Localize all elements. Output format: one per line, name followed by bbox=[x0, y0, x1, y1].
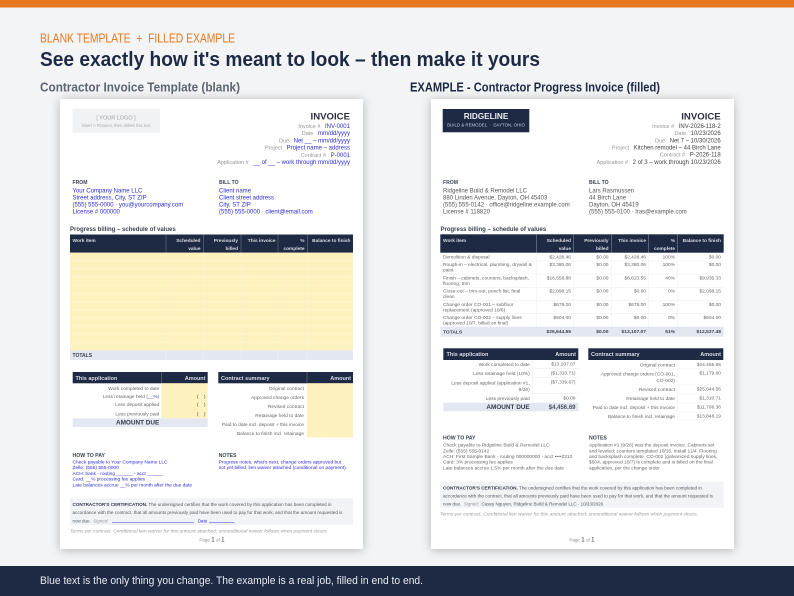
row: change order 001: $0.00 bbox=[709, 302, 721, 308]
contract summary table: Revised contract bbox=[268, 404, 305, 410]
logo placeholder bbox=[72, 109, 160, 133]
row: demolition bbox=[443, 255, 721, 261]
schedule of values table: Balance to finish bbox=[683, 238, 721, 244]
logo: Ridgeline bbox=[443, 109, 529, 132]
row: finish: $0.00 bbox=[596, 276, 609, 282]
contract summary table: $25,644.55 bbox=[697, 386, 721, 392]
this application table: ($7,339.67) bbox=[551, 380, 576, 386]
how to pay: HOW TO PAY bbox=[72, 453, 106, 459]
row: change order 002 bbox=[443, 315, 721, 326]
schedule of values table: billed bbox=[225, 246, 238, 252]
logo: Ridgeline: BUILD & REMODEL · DAYTON, OHIO bbox=[447, 123, 525, 128]
schedule of values table: Scheduled bbox=[547, 238, 571, 244]
schedule of values table: Balance to finish bbox=[312, 238, 351, 244]
contract summary table: Original contract bbox=[269, 386, 305, 392]
row: close-out: 0% bbox=[668, 289, 676, 295]
schedule of values table: Previously bbox=[584, 238, 609, 244]
notes: not yet billed, lien waiver attached (conditional on payment). bbox=[219, 465, 347, 471]
invoice heading and meta: INVOICE bbox=[311, 112, 351, 122]
contract summary table: $1,179.00 bbox=[699, 370, 721, 376]
notes: and leveled; counters templated 10/16, install 11/4. Flooring bbox=[589, 448, 717, 454]
from block: 880 Linden Avenue, Dayton, OH 45403 bbox=[443, 196, 548, 202]
certification box: Date bbox=[198, 518, 208, 523]
invoice heading and meta: Application # __ of __ – work through mm/dd/yyyy bbox=[217, 160, 350, 166]
notes: application, per the change order. bbox=[589, 465, 661, 471]
contract summary table: Amount bbox=[330, 376, 351, 382]
from block bbox=[72, 180, 183, 216]
bill to block bbox=[589, 180, 687, 216]
row: change order 002: 0% bbox=[668, 315, 676, 321]
row: change order 002: $0.00 bbox=[634, 315, 646, 321]
how to pay: Check payable to Your Company Name LLC bbox=[72, 460, 168, 466]
how to pay: Late balances accrue 1.5% per month after the due date bbox=[443, 465, 564, 471]
row: rough-in: $3,380.06 bbox=[624, 262, 646, 268]
schedule of values table bbox=[440, 234, 724, 337]
row: change order 001: $675.00 bbox=[553, 302, 571, 308]
notes: $504, approved 10/7) is complete and is billed on the final bbox=[589, 460, 713, 466]
this application table: Less deposit applied bbox=[115, 402, 160, 408]
row: totals: TOTALS bbox=[443, 330, 463, 336]
invoice heading and meta: Due Net 7 – 10/30/2026 bbox=[655, 139, 721, 145]
how to pay: Zelle: (555) 555-0142 bbox=[443, 448, 490, 454]
logo: Ridgeline: RIDGELINE bbox=[464, 112, 509, 121]
how to pay: Late balances accrue __% per month after the due date bbox=[72, 482, 192, 488]
this application table: 9/26) bbox=[519, 387, 530, 393]
row: rough-in: 100% bbox=[663, 262, 676, 268]
row: change order 001: $675.00 bbox=[628, 302, 646, 308]
bill to block: City, ST ZIP bbox=[219, 203, 251, 209]
row: change order 002: $504.00 bbox=[703, 315, 721, 321]
from block: Your Company Name LLC bbox=[72, 188, 143, 194]
invoice heading and meta bbox=[597, 112, 721, 166]
this application table: Work completed to date bbox=[108, 386, 160, 392]
certification box: CONTRACTOR'S CERTIFICATION. The undersigned certifies that the work covered by this application has been completed in bbox=[72, 502, 332, 507]
row: finish bbox=[443, 276, 721, 287]
schedule of values table: complete bbox=[283, 246, 305, 252]
this application table: ( ) bbox=[197, 394, 206, 400]
row: change order 001 bbox=[443, 302, 721, 314]
row: finish: $16,556.88 bbox=[547, 276, 571, 282]
row: rough-in: Rough-in – electrical, plumbing, drywall & bbox=[443, 262, 533, 268]
page number: Page 1 of 1 bbox=[569, 536, 595, 543]
row: close-out: $2,098.15 bbox=[549, 289, 571, 295]
from block: (555) 555-0142 · office@ridgeline.example.com bbox=[443, 203, 570, 209]
how to pay: Zelle: (555) 555-0000 bbox=[72, 465, 119, 471]
row: close-out bbox=[443, 289, 721, 300]
row: demolition: Demolition & disposal bbox=[443, 255, 490, 261]
row: change order 001: 100% bbox=[663, 302, 676, 308]
from block: (555) 555-0000 · you@yourcompany.com bbox=[72, 203, 183, 209]
how to pay bbox=[443, 436, 573, 471]
schedule of values table bbox=[70, 234, 353, 360]
this application table: Less retainage held (10%) bbox=[473, 371, 530, 377]
schedule of values table: Work item bbox=[72, 238, 96, 244]
how to pay: ACH: First Sample Bank - routing 000000000 - acct ••••2210 bbox=[443, 454, 573, 460]
this application table bbox=[73, 372, 208, 427]
certification box: accordance with the contract, that all amounts previously paid have been used to pay for that work, and that the amount requested is bbox=[443, 493, 714, 498]
invoice heading and meta: Date 10/23/2026 bbox=[674, 131, 721, 137]
contract summary table: $1,310.71 bbox=[699, 396, 721, 402]
this application table: Less previously paid bbox=[486, 396, 530, 402]
this application table: ( ) bbox=[197, 412, 206, 418]
row: totals: $13,107.07 bbox=[622, 329, 646, 335]
contract summary table: Balance to finish incl. retainage bbox=[608, 414, 675, 420]
row: change order 002: Change order CO-002 – supply lines bbox=[443, 315, 522, 321]
bill to block: (555) 555-0000 · client@email.com bbox=[219, 210, 313, 216]
panel: filled example invoice bbox=[431, 99, 734, 549]
page number: Page 1 of 1 bbox=[199, 537, 225, 544]
contract summary table bbox=[218, 372, 353, 438]
notes: Application #1 (9/26) was the deposit invoice. Cabinets set bbox=[589, 443, 715, 449]
this application table: Less deposit applied (application #1, bbox=[451, 380, 530, 386]
row: demolition: $2,428.46 bbox=[549, 255, 571, 261]
row: close-out: clean bbox=[443, 294, 455, 300]
how to pay bbox=[72, 453, 192, 488]
bill to block: Client name bbox=[219, 188, 252, 194]
this application table: ( ) bbox=[197, 402, 206, 408]
contract summary table: Original contract bbox=[640, 362, 676, 368]
footer band: Blue text is the only thing you change. The example is a real job, filled in end to end. bbox=[40, 575, 423, 587]
row: rough-in: $0.00 bbox=[596, 262, 609, 268]
notes bbox=[589, 436, 717, 471]
schedule of values table: value bbox=[188, 246, 201, 252]
eyebrow: BLANK TEMPLATE + FILLED EXAMPLE bbox=[40, 32, 235, 46]
schedule of values table: % bbox=[671, 238, 676, 244]
schedule of values table: Work item bbox=[443, 238, 466, 244]
invoice heading and meta: Contract # P-0001 bbox=[301, 153, 351, 159]
schedule of values table: complete bbox=[654, 246, 675, 252]
bill to block: Client street address bbox=[219, 196, 274, 202]
invoice heading and meta: Contract # P-2026-118 bbox=[660, 153, 721, 159]
from block: Street address, City, ST ZIP bbox=[72, 196, 147, 202]
subheading: blank template: Contractor Invoice Template (blank) bbox=[40, 80, 240, 94]
row: finish: Finish – cabinets, counters, backsplash, bbox=[443, 276, 529, 282]
this application table bbox=[443, 348, 578, 411]
this application table: AMOUNT DUE bbox=[116, 420, 160, 427]
contract summary table: Approved change orders bbox=[251, 395, 305, 401]
how to pay: HOW TO PAY bbox=[443, 436, 476, 442]
this application table: Work completed to date bbox=[479, 362, 530, 368]
schedule of values heading: Progress billing – schedule of values bbox=[440, 227, 547, 233]
row: finish: 40% bbox=[665, 276, 676, 282]
how to pay: Card: 3% processing fee applies bbox=[443, 460, 513, 466]
invoice heading and meta: INVOICE bbox=[681, 112, 721, 122]
from block: License # 118820 bbox=[443, 210, 491, 216]
row: finish: $9,935.33 bbox=[699, 276, 721, 282]
from block: FROM bbox=[443, 180, 458, 186]
contract summary table: Contract summary bbox=[591, 352, 641, 358]
contract summary table: Approved change orders (CO-001, bbox=[601, 371, 675, 377]
bill to block: BILL TO bbox=[219, 180, 239, 186]
how to pay: Card: __% processing fee applies bbox=[72, 477, 146, 483]
contract summary table: Balance to finish incl. retainage bbox=[237, 431, 304, 437]
this application table: Amount bbox=[555, 352, 576, 358]
notes: Progress notes, what's next, change orders approved but bbox=[219, 460, 342, 466]
row: rough-in bbox=[443, 262, 721, 274]
contract summary table bbox=[588, 348, 723, 420]
this application table: Amount bbox=[185, 376, 206, 382]
this application table: ($1,310.71) bbox=[551, 370, 576, 376]
from block: License # 000000 bbox=[72, 210, 121, 216]
row: change order 002: $504.00 bbox=[553, 315, 571, 321]
row: totals bbox=[443, 329, 721, 336]
contract summary table: Revised contract bbox=[639, 387, 676, 393]
bill to block bbox=[219, 180, 313, 216]
row: rough-in: $0.00 bbox=[709, 262, 721, 268]
invoice heading and meta: Due Net __ – mm/dd/yyyy bbox=[279, 138, 350, 144]
row: close-out: $0.00 bbox=[596, 289, 609, 295]
title: See exactly how it's meant to look – then make it yours bbox=[40, 48, 540, 71]
invoice heading and meta: Project Kitchen remodel – 44 Birch Lane bbox=[612, 146, 721, 152]
terms line: Terms per contract. Conditional lien waiver for this amount attached; unconditional waiver follows when payment clears. bbox=[440, 512, 698, 517]
notes bbox=[219, 453, 347, 471]
row: change order 002: (approved 10/7, billed on final) bbox=[443, 320, 509, 326]
row: totals: $12,537.48 bbox=[697, 329, 721, 335]
notes: NOTES bbox=[589, 436, 607, 442]
row: rough-in: paint bbox=[443, 268, 454, 274]
schedule of values table: This invoice bbox=[618, 238, 646, 244]
row: change order 001: $0.00 bbox=[596, 302, 609, 308]
schedule of values table: Scheduled bbox=[176, 238, 201, 244]
row: totals: $0.00 bbox=[596, 329, 609, 335]
contract summary table: Amount bbox=[700, 352, 721, 358]
bill to block: Dayton, OH 45419 bbox=[589, 203, 639, 209]
bill to block: 44 Birch Lane bbox=[589, 196, 627, 202]
this application table: $13,107.07 bbox=[551, 362, 576, 368]
row: change order 001: Change order CO-001 – subfloor bbox=[443, 302, 514, 308]
footer band bbox=[0, 566, 794, 596]
this application table: $4,456.69 bbox=[549, 405, 576, 411]
invoice heading and meta bbox=[217, 112, 351, 166]
this application table: AMOUNT DUE bbox=[486, 404, 530, 411]
row: finish: flooring, trim bbox=[443, 281, 470, 287]
row: close-out: $2,098.15 bbox=[699, 289, 721, 295]
this application table: This application bbox=[76, 376, 118, 382]
schedule of values table: % bbox=[300, 238, 305, 244]
from block: Ridgeline Build & Remodel LLC bbox=[443, 188, 528, 194]
invoice heading and meta: Invoice # INV-2026-118-2 bbox=[652, 124, 721, 130]
invoice heading and meta: Invoice # INV-0001 bbox=[298, 124, 351, 130]
contract summary table: CO-002) bbox=[656, 378, 675, 384]
schedule of values table: billed bbox=[596, 246, 609, 252]
this application table: This application bbox=[446, 352, 489, 358]
invoice heading and meta: Project Project name – address bbox=[265, 146, 350, 152]
notes: and backsplash complete. CO-002 (galvanized supply lines, bbox=[589, 454, 717, 460]
how to pay: ACH: bank - routing ______ - acct ______ bbox=[72, 471, 164, 477]
bill to block: (555) 555-0100 · lras@example.com bbox=[589, 210, 687, 216]
contract summary table: $11,796.36 bbox=[697, 404, 721, 410]
logo placeholder: Insert > Pictures, then delete this text bbox=[81, 123, 151, 128]
schedule of values table: Previously bbox=[214, 238, 238, 244]
certification box: CONTRACTOR'S CERTIFICATION. The undersigned certifies that the work covered by this application has been completed in bbox=[443, 485, 703, 490]
bill to block: BILL TO bbox=[589, 180, 609, 186]
contract summary table: Contract summary bbox=[221, 376, 271, 382]
invoice heading and meta: Date mm/dd/yyyy bbox=[302, 131, 350, 137]
top orange bar bbox=[0, 0, 794, 8]
from block: FROM bbox=[72, 180, 88, 186]
certification box: now due. Signed: Casey Nguyen, Ridgeline Build & Remodel LLC · 10/23/2026 bbox=[443, 501, 604, 506]
contract summary table: Retainage held to date bbox=[255, 413, 304, 419]
this application table: Less previously paid bbox=[115, 412, 160, 418]
row: totals: $25,644.55 bbox=[547, 329, 571, 335]
notes: NOTES bbox=[219, 453, 237, 459]
contract summary table: $24,465.55 bbox=[697, 362, 721, 368]
row: close-out: $0.00 bbox=[634, 289, 646, 295]
schedule of values table: This invoice bbox=[248, 238, 276, 244]
certification box: now due. Signed: bbox=[72, 518, 109, 523]
contract summary table: Paid to date incl. deposit + this invoice bbox=[222, 422, 304, 428]
contract summary table: Paid to date incl. deposit + this invoice bbox=[593, 405, 675, 411]
this application table: $0.00 bbox=[563, 396, 576, 402]
row: demolition: 100% bbox=[663, 255, 676, 261]
row: demolition: $0.00 bbox=[596, 255, 609, 261]
schedule of values heading: Progress billing – schedule of values bbox=[70, 227, 176, 233]
row: rough-in: $3,380.06 bbox=[549, 262, 571, 268]
panel: blank invoice template bbox=[60, 99, 363, 549]
subheading: filled example: EXAMPLE - Contractor Progress Invoice (filled) bbox=[410, 80, 660, 94]
how to pay: Check payable to Ridgeline Build & Remodel LLC bbox=[443, 443, 550, 449]
row: totals: 51% bbox=[665, 329, 676, 335]
row: change order 002: $0.00 bbox=[596, 315, 609, 321]
row: finish: $6,623.55 bbox=[624, 276, 646, 282]
certification box: accordance with the contract, that all amounts previously paid have been used to pay for that work, and that the amount requested is bbox=[72, 510, 343, 515]
logo placeholder: [ YOUR LOGO ] bbox=[96, 116, 136, 122]
row: close-out: Close-out – trim-out, punch list, final bbox=[443, 289, 520, 295]
certification box bbox=[440, 482, 724, 508]
bill to block: Lars Rasmussen bbox=[589, 188, 634, 194]
terms line: Terms per contract. Conditional lien waiver for this amount attached; unconditional waiver follows when payment clears. bbox=[70, 529, 328, 534]
contract summary table: Retainage held to date bbox=[626, 396, 675, 402]
this application table: Less retainage held (__%) bbox=[103, 394, 160, 400]
row: change order 001: replacement (approved 10/6) bbox=[443, 308, 506, 314]
invoice heading and meta: Application # 2 of 3 – work through 10/23/2026 bbox=[597, 160, 721, 166]
certification box bbox=[70, 498, 353, 525]
schedule of values table: value bbox=[559, 246, 571, 252]
from block bbox=[443, 180, 570, 216]
row: demolition: $2,428.46 bbox=[624, 255, 646, 261]
schedule of values table: TOTALS bbox=[72, 353, 93, 359]
contract summary table: $13,848.19 bbox=[697, 414, 721, 420]
row: demolition: $0.00 bbox=[709, 255, 721, 261]
